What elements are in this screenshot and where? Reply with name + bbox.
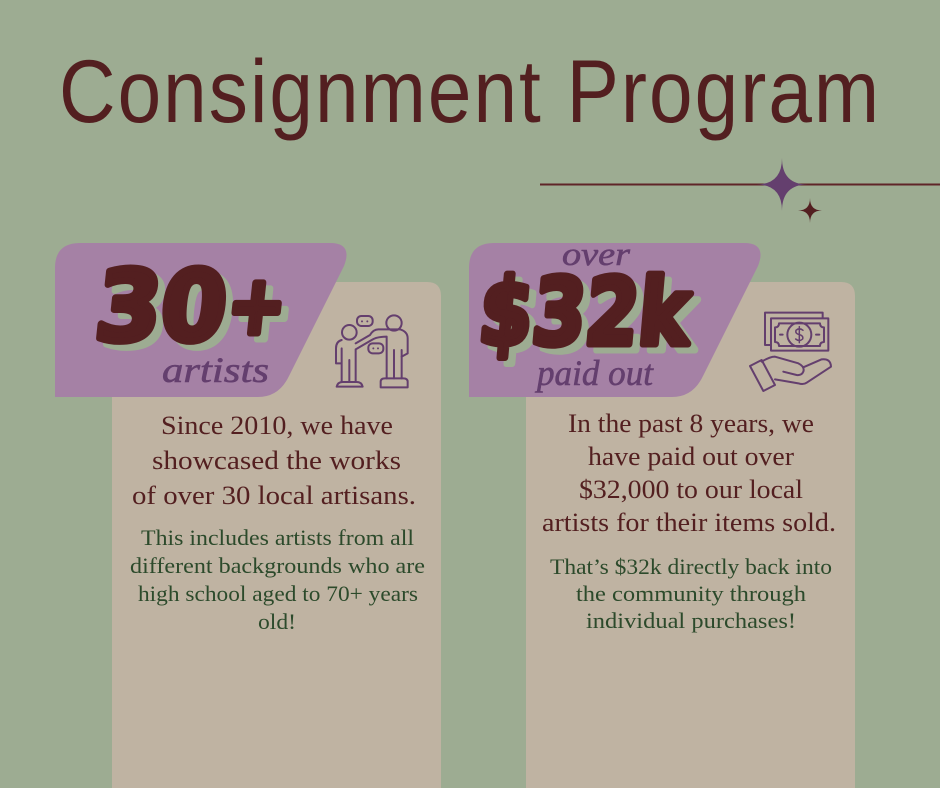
big number shadow: + bbox=[230, 265, 298, 358]
icon: two people talking bbox=[336, 315, 408, 387]
lead text: showcased the works bbox=[152, 446, 401, 475]
over label: over bbox=[562, 237, 630, 273]
supporting text: old! bbox=[258, 609, 296, 634]
supporting text: high school aged to 70+ years bbox=[138, 581, 418, 606]
big number: $32k bbox=[475, 258, 697, 366]
lead text: have paid out over bbox=[588, 442, 794, 471]
card background bbox=[526, 282, 855, 788]
lead text: of over 30 local artisans. bbox=[132, 481, 416, 510]
big number: + bbox=[223, 259, 291, 352]
lead text bbox=[542, 409, 836, 537]
icon: small maroon sparkle bbox=[798, 198, 822, 223]
lead text: artists for their items sold. bbox=[542, 508, 836, 537]
supporting text: This includes artists from all bbox=[141, 525, 414, 550]
artists label: artists bbox=[162, 350, 269, 390]
paid out label: paid out bbox=[534, 353, 654, 393]
panel: paid out bbox=[469, 237, 855, 788]
lead text: Since 2010, we have bbox=[161, 411, 393, 440]
icon: large purple sparkle bbox=[756, 158, 808, 211]
supporting text: That’s $32k directly back into bbox=[550, 554, 832, 579]
supporting text: the community through bbox=[576, 581, 806, 606]
lead text bbox=[132, 411, 416, 510]
badge bbox=[469, 243, 761, 397]
supporting text: different backgrounds who are bbox=[130, 553, 425, 578]
title: Consignment Program bbox=[59, 41, 879, 141]
lead text: In the past 8 years, we bbox=[568, 409, 814, 438]
big number shadow: $32k bbox=[482, 264, 704, 372]
lead text: $32,000 to our local bbox=[579, 475, 803, 504]
badge bbox=[55, 243, 347, 397]
supporting text: individual purchases! bbox=[586, 608, 796, 633]
supporting text bbox=[130, 525, 425, 634]
panel: artists bbox=[55, 243, 441, 788]
big number: 30 bbox=[91, 250, 232, 363]
card background bbox=[112, 282, 441, 788]
divider with sparkles bbox=[540, 158, 940, 223]
supporting text bbox=[550, 554, 832, 633]
icon: hand holding money bbox=[750, 313, 831, 391]
big number shadow: 30 bbox=[98, 256, 239, 369]
